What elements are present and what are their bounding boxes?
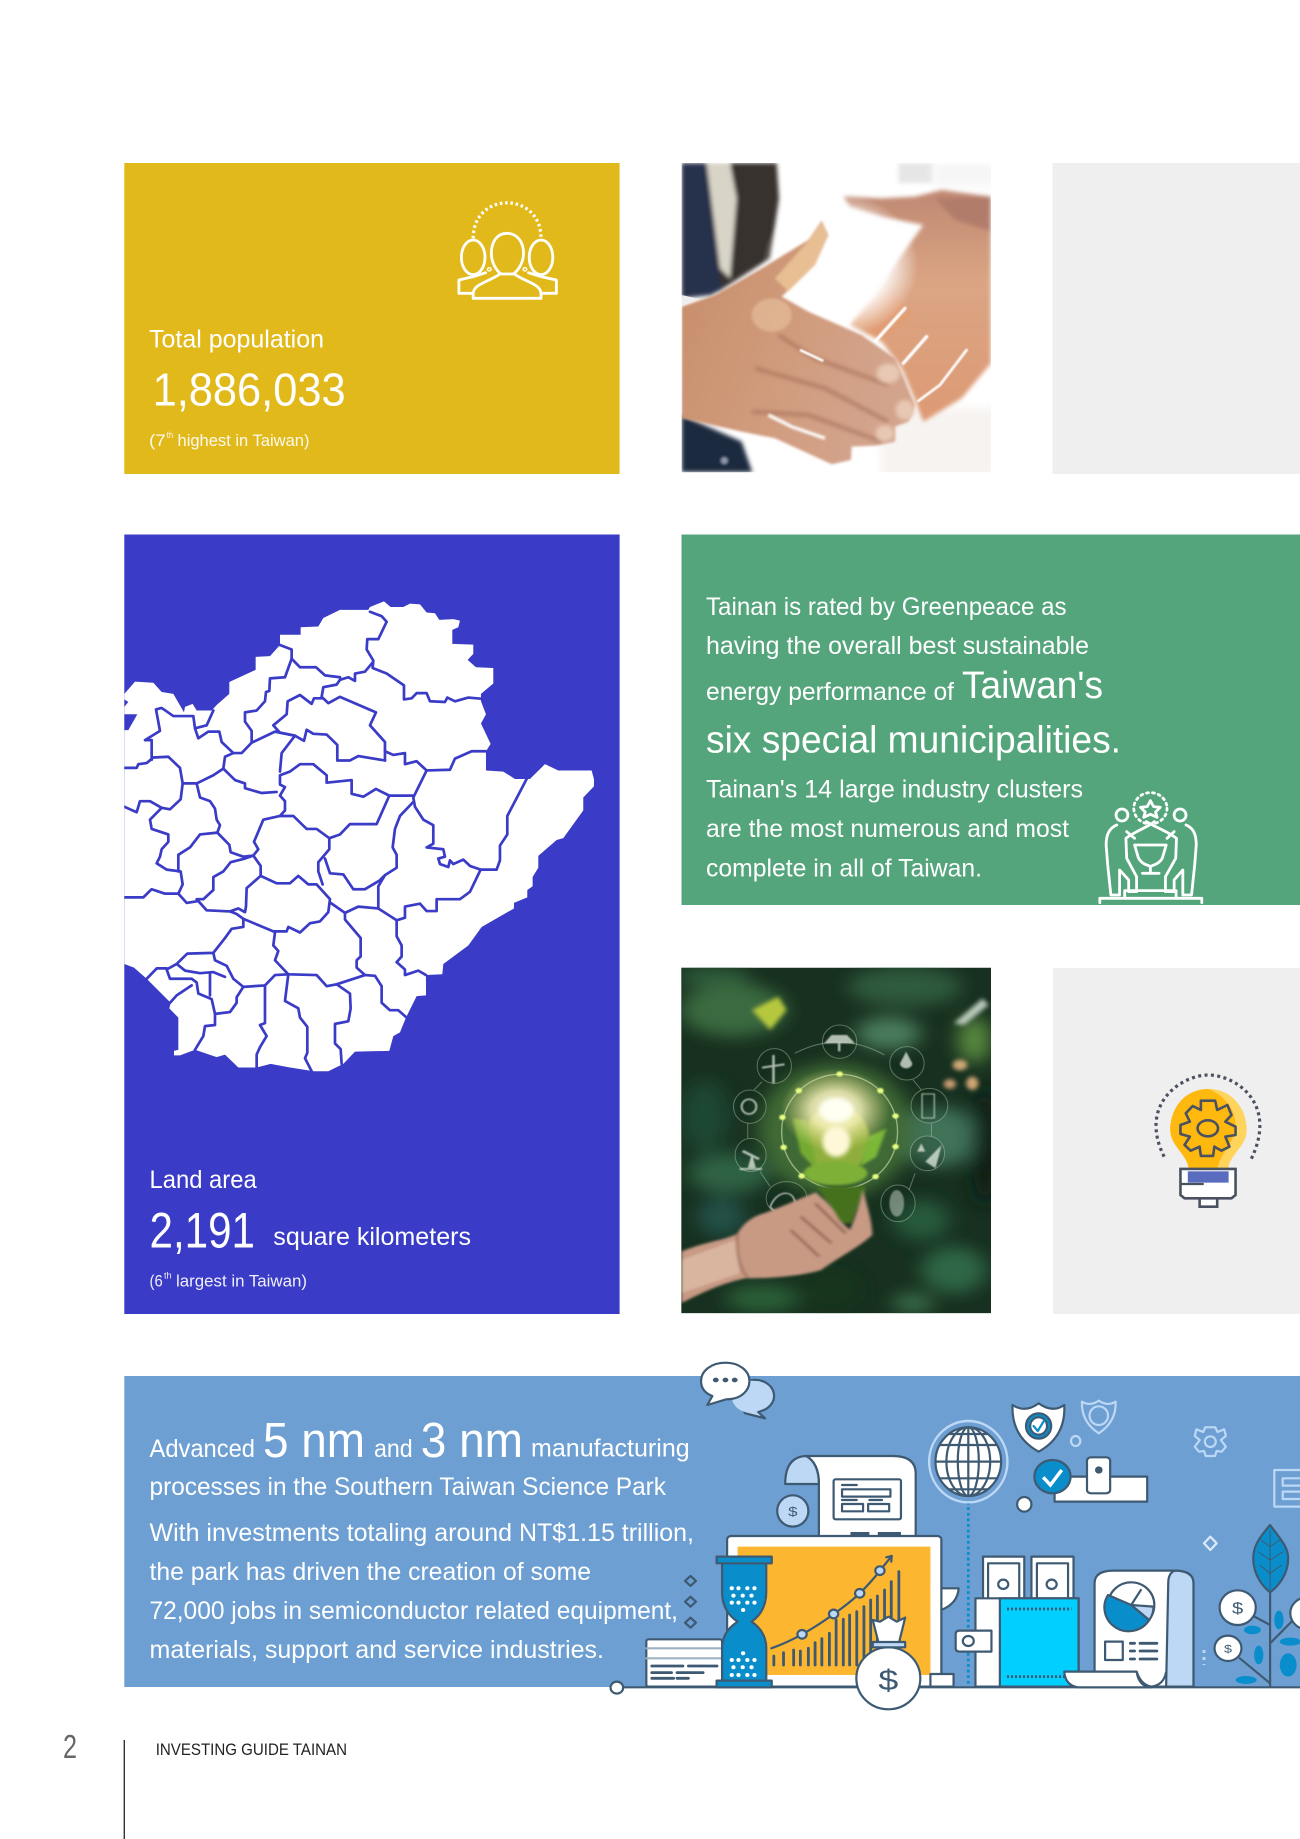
panel: grey top right	[1052, 163, 1300, 474]
text: 5 nm and 3 nm headline: 3 nm	[421, 1414, 523, 1468]
page number: 2	[63, 1728, 77, 1765]
unit: square kilometers: square kilometers	[273, 1223, 471, 1251]
icon: document scroll	[785, 1456, 916, 1537]
photo: lightbulb with energy icons	[676, 967, 997, 1313]
icon: lightbulb with gear	[1156, 1075, 1260, 1207]
footer title: INVESTING GUIDE TAINAN	[156, 1740, 347, 1759]
small energy glyphs	[740, 1035, 942, 1217]
icon: people group	[459, 203, 556, 298]
icon: hourglass	[717, 1557, 772, 1687]
note: population rank: highest in Taiwan)	[178, 431, 310, 450]
text: investment details: 72,000 jobs in semiconductor related equipment,	[150, 1597, 678, 1625]
text: 5 nm and 3 nm headline: and	[374, 1435, 413, 1463]
icon: coin	[777, 1495, 808, 1527]
label: total population: Total population	[149, 325, 324, 353]
text: industry clusters: are the most numerous and most	[706, 815, 1069, 843]
text: 5 nm and 3 nm headline	[150, 1414, 690, 1501]
text: industry clusters	[706, 776, 1083, 882]
icon: money bag: $	[878, 1665, 898, 1696]
map of Tainan districts	[124, 601, 594, 1071]
dotted connector	[967, 1502, 970, 1687]
text: investment details: With investments totaling around NT$1.15 trillion,	[150, 1519, 694, 1547]
note: population rank: (7	[149, 431, 166, 450]
photo: handshake	[682, 163, 998, 478]
icon: diamonds	[685, 1537, 1217, 1628]
panel: grey with lightbulb gear	[1053, 968, 1300, 1314]
note: population rank: th	[167, 430, 173, 440]
text: 5 nm and 3 nm headline: Advanced	[150, 1435, 255, 1463]
icon: card	[646, 1639, 722, 1687]
icon: globe	[929, 1421, 1007, 1502]
label: land area: Land area	[150, 1166, 257, 1194]
text: 5 nm and 3 nm headline: 5 nm	[263, 1414, 365, 1468]
number: population: 1,886,033	[153, 364, 346, 416]
text: industry clusters: Tainan's 14 large industry clusters	[706, 776, 1083, 804]
text: investment details: the park has driven the creation of some	[150, 1558, 591, 1586]
text: Greenpeace rating: energy performance of	[706, 678, 954, 706]
icon: check panel	[1017, 1457, 1147, 1512]
icon: shield	[1012, 1403, 1064, 1452]
baseline with end node	[611, 1682, 1300, 1694]
hand holding bulb	[681, 1189, 872, 1303]
icon: money plant: $	[1232, 1599, 1243, 1617]
energy icon rings	[733, 1025, 948, 1222]
icon: trophy and two people	[1100, 793, 1202, 903]
text: Greenpeace rating: Taiwan's	[962, 665, 1103, 707]
icon: coin: $	[788, 1505, 798, 1519]
icon: laptop chart	[727, 1536, 959, 1687]
illustration: finance and technology scene	[611, 1363, 1300, 1709]
icon: chat bubbles	[701, 1363, 774, 1418]
note: land area rank: th	[164, 1270, 172, 1280]
text: 5 nm and 3 nm headline: manufacturing	[531, 1434, 690, 1462]
text: Greenpeace rating	[706, 593, 1121, 762]
panel: total population	[124, 163, 620, 474]
note: land area rank: (6	[150, 1272, 163, 1291]
text: 5 nm and 3 nm headline: processes in the Southern Taiwan Science Park	[150, 1473, 666, 1501]
icon: faint shield	[1071, 1401, 1116, 1446]
text: Greenpeace rating: having the overall best sustainable	[706, 632, 1089, 660]
text: investment details	[150, 1519, 694, 1664]
footer divider	[124, 1740, 125, 1839]
text: Greenpeace rating: Tainan is rated by Greenpeace as	[706, 593, 1067, 621]
bulb glow	[779, 1068, 899, 1223]
text: Greenpeace rating: six special municipalities.	[706, 720, 1121, 762]
icon: money plant: $	[1224, 1642, 1232, 1655]
icon: wallet with banknotes	[956, 1557, 1079, 1687]
panel: semiconductor park	[124, 1363, 1300, 1709]
panel: land area	[124, 534, 620, 1314]
icon: money plant	[1204, 1525, 1300, 1687]
icon: report with pie chart	[1064, 1571, 1193, 1687]
text: investment details: materials, support and service industries.	[150, 1636, 604, 1664]
icon: gear	[1195, 1427, 1226, 1456]
number: land area: 2,191	[150, 1203, 255, 1259]
icon: money bag	[856, 1617, 920, 1709]
note: land area rank: largest in Taiwan)	[176, 1272, 307, 1291]
icon: faint document	[1274, 1470, 1300, 1507]
text: industry clusters: complete in all of Taiwan.	[706, 854, 982, 882]
panel: sustainable energy	[682, 534, 1300, 905]
